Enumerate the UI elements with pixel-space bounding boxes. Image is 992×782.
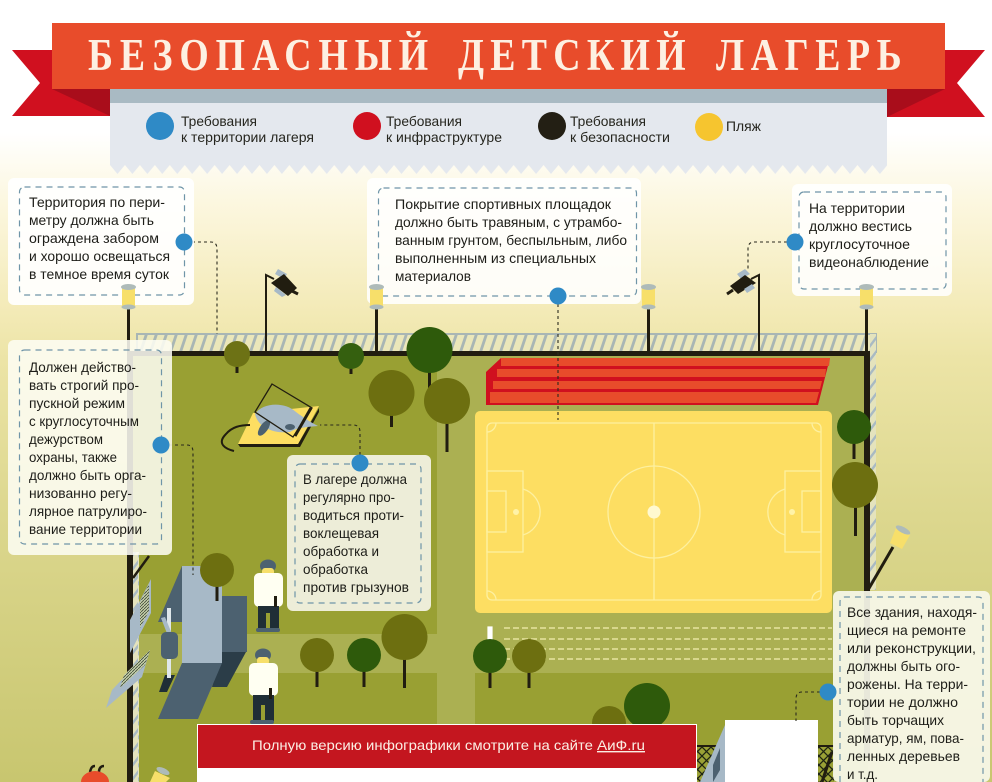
tree [837, 410, 871, 459]
legend: beach: Пляж [726, 118, 762, 134]
tilted lamp right [868, 524, 911, 590]
ribbon right [887, 50, 985, 117]
legend: infrastructure: к инфраструктуре [386, 129, 502, 145]
security camera left [266, 269, 298, 352]
tree [368, 370, 414, 427]
legend: infrastructure [353, 112, 502, 145]
legend: camp territory [146, 112, 314, 145]
tree [473, 639, 507, 688]
legend: infrastructure: Требования [386, 113, 462, 129]
guard 1 [254, 560, 283, 632]
callout: buildings under repair [820, 591, 990, 782]
tilted lamp bottom [150, 765, 171, 782]
callout: sports surface: должно быть травяным, с утрамбо- [395, 214, 622, 230]
tree [406, 327, 452, 388]
callout: buildings under repair: рожены. На терри- [847, 676, 968, 692]
callout: perimeter fence: ограждена забором [29, 230, 159, 246]
callout: access control: охраны, также [29, 449, 117, 465]
gate checkpoint [158, 566, 247, 719]
tree [224, 341, 250, 373]
legend: safety: Требования [570, 113, 646, 129]
callout: access control: вание территории [29, 521, 142, 537]
callout: buildings under repair: ленных деревьев [847, 748, 960, 764]
top fence [133, 334, 876, 782]
callout: tick and rodent control: обработка [303, 561, 368, 577]
callout: video surveillance: На территории [809, 200, 905, 216]
callout: buildings under repair: Все здания, находя- [847, 604, 977, 620]
bottom banner: АиФ.ru [597, 737, 645, 753]
tree [347, 638, 381, 687]
tree over gate [200, 553, 234, 601]
bottom banner: Полную версию инфографики смотрите на сайте [252, 737, 593, 753]
running track [488, 627, 832, 659]
callout: video surveillance [786, 184, 952, 296]
legend: safety: к безопасности [570, 129, 670, 145]
lamp 2 [369, 284, 384, 310]
perimeter wall [127, 351, 870, 782]
callout: access control: дежурством [29, 431, 103, 447]
connector: perimeter [192, 242, 217, 334]
callout: sports surface: ванным грунтом, беспыльным, либо [395, 232, 627, 248]
callout: perimeter fence: метру должна быть [29, 212, 154, 228]
callout: video surveillance: круглосуточное [809, 236, 910, 252]
legend panel [110, 89, 887, 175]
callout: sports surface: материалов [395, 268, 471, 284]
callout: access control: пускной режим [29, 395, 125, 411]
callout: perimeter fence: в темное время суток [29, 266, 170, 282]
callout: access control: с круглосуточным [29, 413, 139, 429]
tree [832, 462, 878, 536]
callout: access control: лярное патрулиро- [29, 503, 147, 519]
legend: camp territory: Требования [181, 113, 257, 129]
tree [300, 638, 334, 687]
callout: sports surface [367, 178, 641, 304]
title: БЕЗОПАСНЫЙ [88, 30, 428, 80]
trees [224, 327, 878, 740]
callout: access control: должно быть орга- [29, 467, 146, 483]
callout: buildings under repair: быть торчащих [847, 712, 944, 728]
rat trap [222, 384, 319, 451]
callout: access control [8, 340, 172, 555]
callout: video surveillance: должно вестись [809, 218, 912, 234]
connector: buildings [796, 692, 820, 721]
callout: sports surface: Покрытие спортивных площадок [395, 196, 612, 212]
bottom banner [197, 724, 697, 782]
security camera right [727, 269, 759, 352]
callout: tick and rodent control: обработка и [303, 543, 379, 559]
callout: buildings under repair: арматур, ям, пова- [847, 730, 964, 746]
guard 2 [249, 648, 278, 724]
tree [424, 378, 470, 452]
tree [624, 683, 670, 729]
callout: perimeter fence: Территория по пери- [29, 194, 165, 210]
callout: buildings under repair: тории не должно [847, 694, 958, 710]
football field [475, 411, 832, 613]
callout: tick and rodent control [287, 454, 431, 611]
camp ground [133, 352, 868, 782]
callout: access control: низованно регу- [29, 485, 132, 501]
lamp poles [127, 309, 868, 352]
callout: buildings under repair: или реконструкции, [847, 640, 976, 656]
title [52, 23, 945, 89]
lamp 1 [121, 284, 136, 310]
lamp 4 [859, 284, 874, 310]
red beetle [81, 766, 109, 782]
callout: access control: вать строгий про- [29, 377, 139, 393]
legend: beach [695, 113, 762, 141]
callout: buildings under repair: и т.д. [847, 766, 878, 782]
callout: tick and rodent control: против грызунов [303, 579, 409, 595]
connector: rodents [320, 425, 360, 455]
callout: tick and rodent control: водиться проти- [303, 507, 404, 523]
bleachers [486, 358, 830, 405]
callout: tick and rodent control: В лагере должна [303, 471, 407, 487]
bottom fence and building [696, 720, 834, 782]
tree [512, 639, 546, 688]
title: ДЕТСКИЙ [458, 30, 686, 80]
legend: safety [538, 112, 670, 145]
ribbon left [12, 50, 110, 116]
tree [382, 614, 428, 688]
callout: buildings under repair: должны быть ого- [847, 658, 960, 674]
connector: surface [557, 304, 559, 420]
callout: tick and rodent control: воклещевая [303, 525, 379, 541]
callout: sports surface: выполненным из специальных [395, 250, 596, 266]
connector: video [748, 242, 787, 270]
lamps [121, 284, 874, 310]
callout: perimeter fence: и хорошо освещаться [29, 248, 170, 264]
gate mesh panels [106, 556, 151, 708]
tree [338, 343, 364, 374]
callout: buildings under repair: щиеся на ремонте [847, 622, 966, 638]
lamp 3 [641, 284, 656, 310]
callout: tick and rodent control: регулярно про- [303, 489, 395, 505]
callout: video surveillance: видеонаблюдение [809, 254, 929, 270]
callout: access control: Должен действо- [29, 359, 136, 375]
connector: patrol [169, 445, 193, 575]
legend: camp territory: к территории лагеря [181, 129, 314, 145]
callout: perimeter fence [8, 178, 194, 305]
tree [592, 706, 626, 740]
title: ЛАГЕРЬ [716, 30, 902, 80]
